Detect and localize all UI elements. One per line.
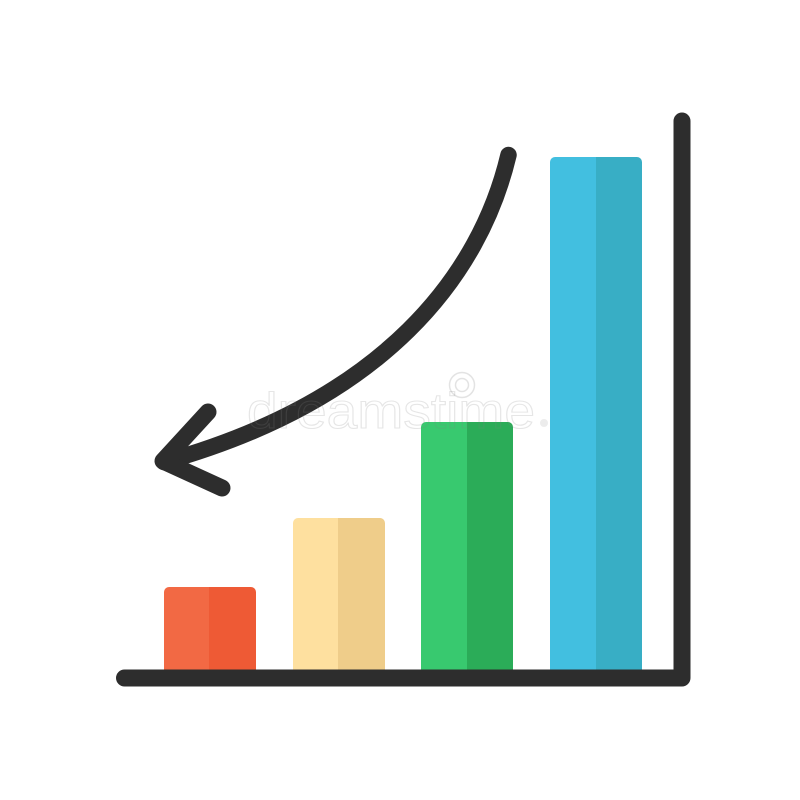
watermark: dreamstime (247, 383, 535, 439)
arrow: downward trend (163, 155, 508, 488)
bar: yellow (293, 518, 385, 672)
bar: green (421, 422, 513, 672)
bar: red (164, 587, 256, 672)
chart axes (124, 121, 682, 678)
bar: blue (550, 157, 642, 672)
